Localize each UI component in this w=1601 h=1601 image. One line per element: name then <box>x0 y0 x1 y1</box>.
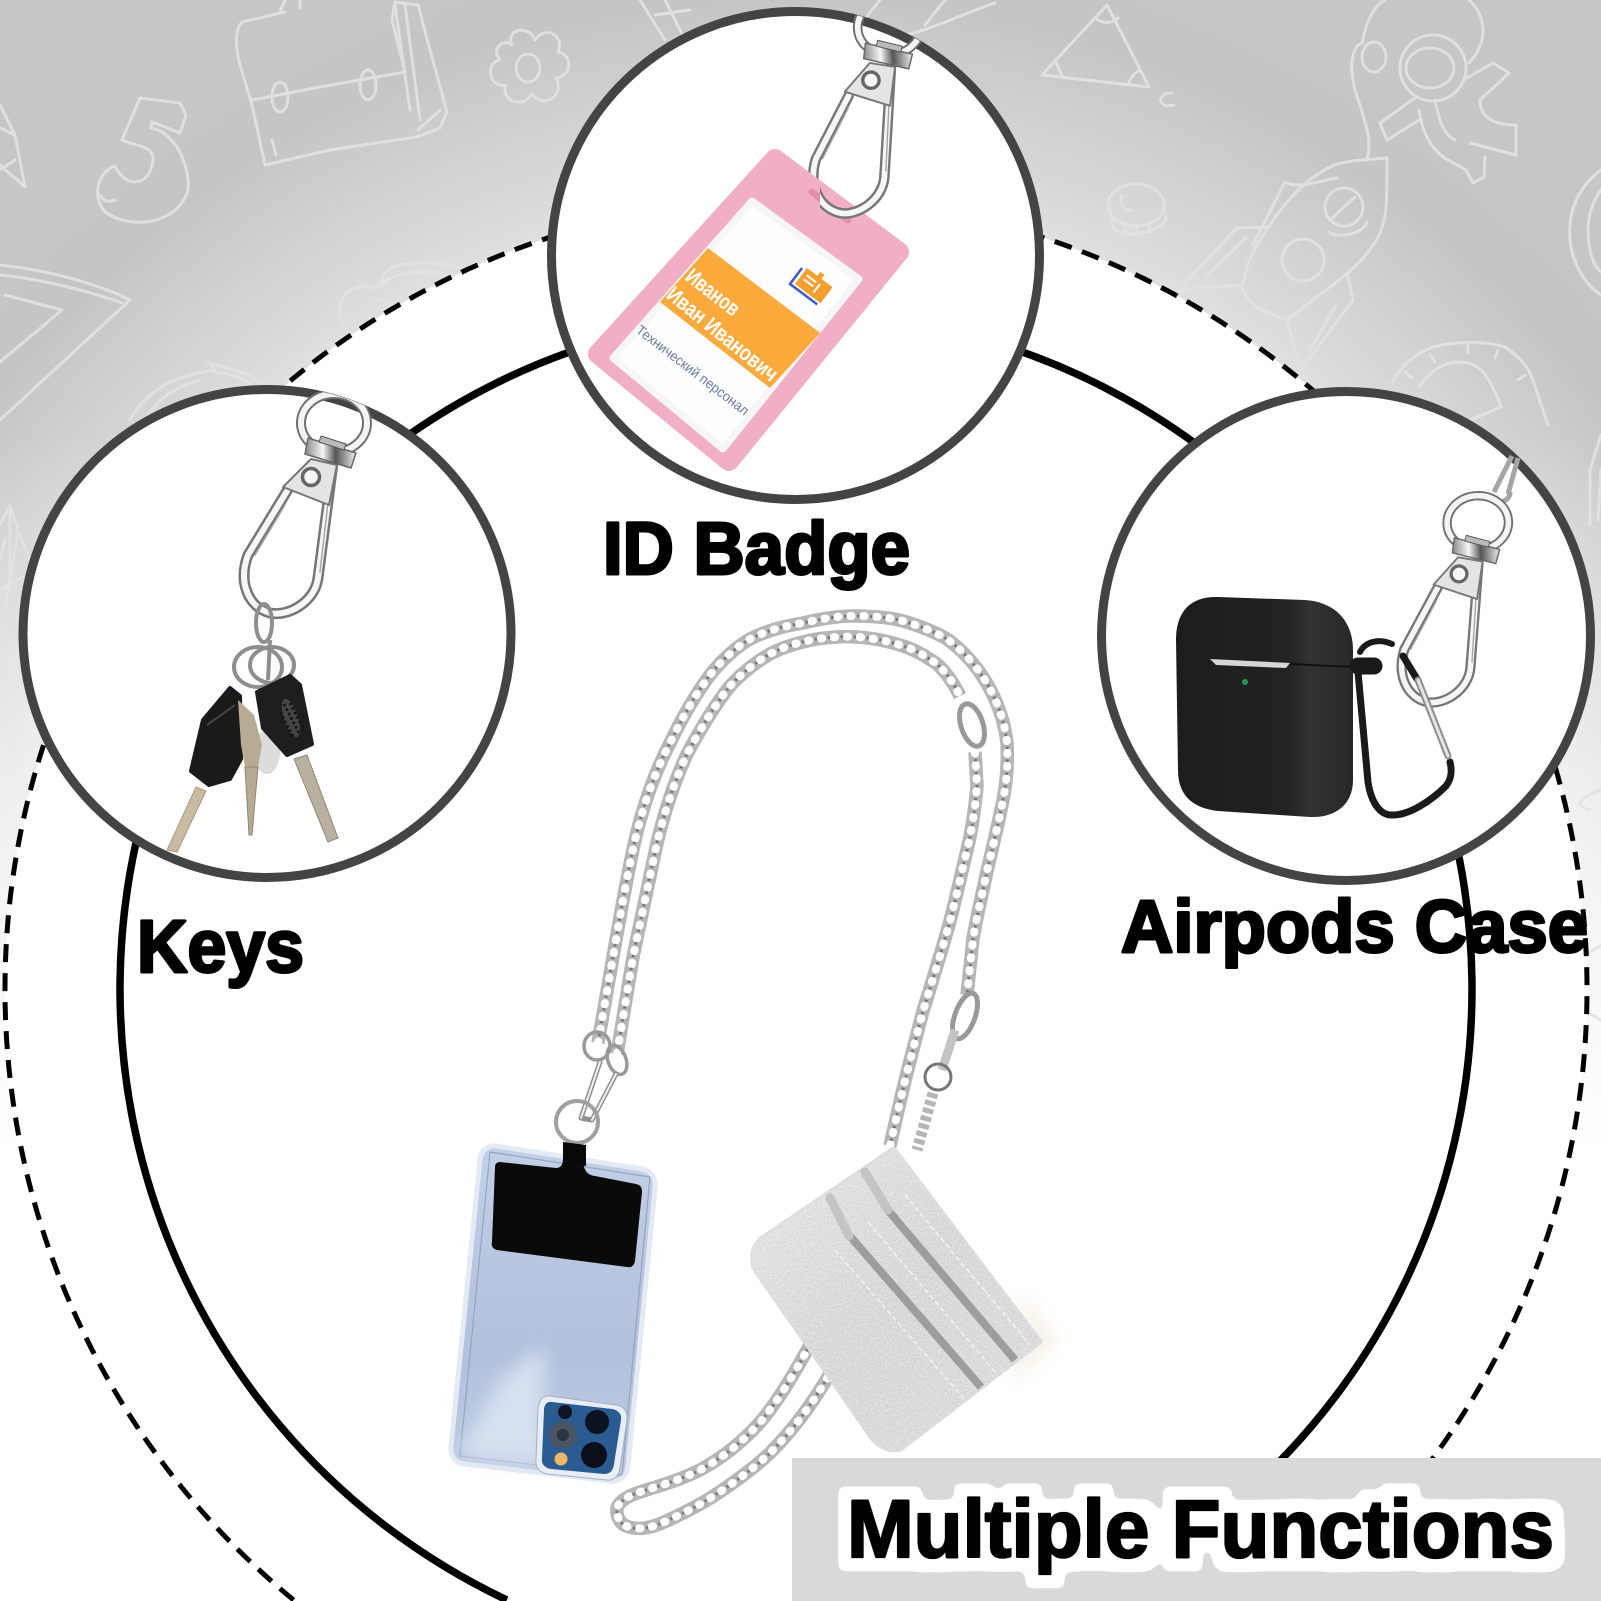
black adhesive patch <box>492 1158 642 1267</box>
doodle: apple shape <box>130 362 270 420</box>
case reflection <box>458 1345 544 1466</box>
doodle: lower right triangle <box>1565 790 1601 1020</box>
icon: snap hook behind holder <box>808 15 922 214</box>
keys illustration <box>167 394 367 852</box>
camera lenses <box>549 1405 609 1468</box>
icon: snap hook <box>244 394 367 614</box>
orange name band <box>660 248 820 388</box>
silver leather zip pouch <box>751 1147 1060 1452</box>
black patch tab <box>563 1142 586 1166</box>
doodle: briefcase <box>236 0 447 165</box>
phone case edge <box>460 1152 650 1475</box>
doodle: pencil at right edge <box>1590 435 1601 525</box>
phone case <box>451 1146 655 1481</box>
doodle: coin <box>1108 184 1166 235</box>
doodle: astronaut <box>1352 0 1516 183</box>
banner <box>792 1458 1601 1601</box>
doodle: right edge arcs <box>1570 170 1601 295</box>
panel: airpods circle <box>1102 392 1590 880</box>
chain metal base <box>598 616 1007 1146</box>
card window <box>613 201 859 449</box>
zipper one <box>830 1198 981 1387</box>
icon: snap hook <box>1393 494 1518 704</box>
pouch body <box>751 1147 1042 1452</box>
role on card: Технический персонал <box>633 322 752 418</box>
name on card: Иванов <box>681 263 745 321</box>
phone with adhesive patch <box>451 1142 655 1481</box>
left strand end links <box>584 1032 631 1077</box>
doodle: bag at left of the badge circle <box>340 263 462 340</box>
doodle: pencil tip <box>0 105 25 187</box>
background: school doodle pattern <box>0 0 1601 1020</box>
oval link lower <box>947 990 983 1042</box>
ID badge illustration <box>598 0 934 461</box>
full name on card: Иван Иванович <box>662 281 783 386</box>
chain link openings <box>598 616 1007 1146</box>
clasp to phone <box>556 1062 616 1143</box>
chain shaded spots <box>598 616 1007 1146</box>
doodle: number 5 <box>98 98 188 222</box>
zipper two <box>865 1172 1015 1360</box>
slot <box>812 192 848 220</box>
airpods illustration <box>1176 456 1518 817</box>
icon: carabiner <box>1358 641 1451 815</box>
doodle: set square <box>0 265 130 420</box>
icon: strap clasp <box>1494 456 1518 501</box>
silver double chain <box>556 616 1007 1150</box>
pink badge holder <box>598 159 899 461</box>
doodle: top marks <box>640 0 995 40</box>
icon: middle key <box>238 700 280 835</box>
doodle: paper plane left <box>0 506 34 610</box>
doodle: triangle and c <box>1042 5 1174 106</box>
label: Keys: Keys <box>137 905 304 988</box>
icon: card logo <box>788 267 832 306</box>
icon: earbud case <box>1176 597 1353 817</box>
icon: right key <box>257 676 338 842</box>
inner solid circle <box>120 313 1472 1600</box>
icon: split rings <box>234 604 294 687</box>
doodle: flower <box>490 30 569 102</box>
doodle: rocket <box>1178 158 1387 370</box>
panel: keys circle <box>23 390 511 878</box>
label: ID Badge: ID Badge <box>603 507 910 590</box>
oval link upper <box>955 701 989 749</box>
hook through slot <box>820 184 885 219</box>
pouch shadow <box>1010 1290 1060 1385</box>
panel: ID badge circle <box>552 0 1040 499</box>
lower chain loop <box>617 1343 832 1528</box>
label: Airpods Case: Airpods Case <box>1121 885 1588 968</box>
doodle: protractor <box>1392 342 1548 425</box>
banner heading: Multiple Functions <box>847 1484 1554 1575</box>
small swivel at pouch strap <box>917 1030 955 1150</box>
icon: left key <box>167 688 241 852</box>
camera module <box>536 1396 627 1480</box>
stitching <box>835 1195 1030 1400</box>
